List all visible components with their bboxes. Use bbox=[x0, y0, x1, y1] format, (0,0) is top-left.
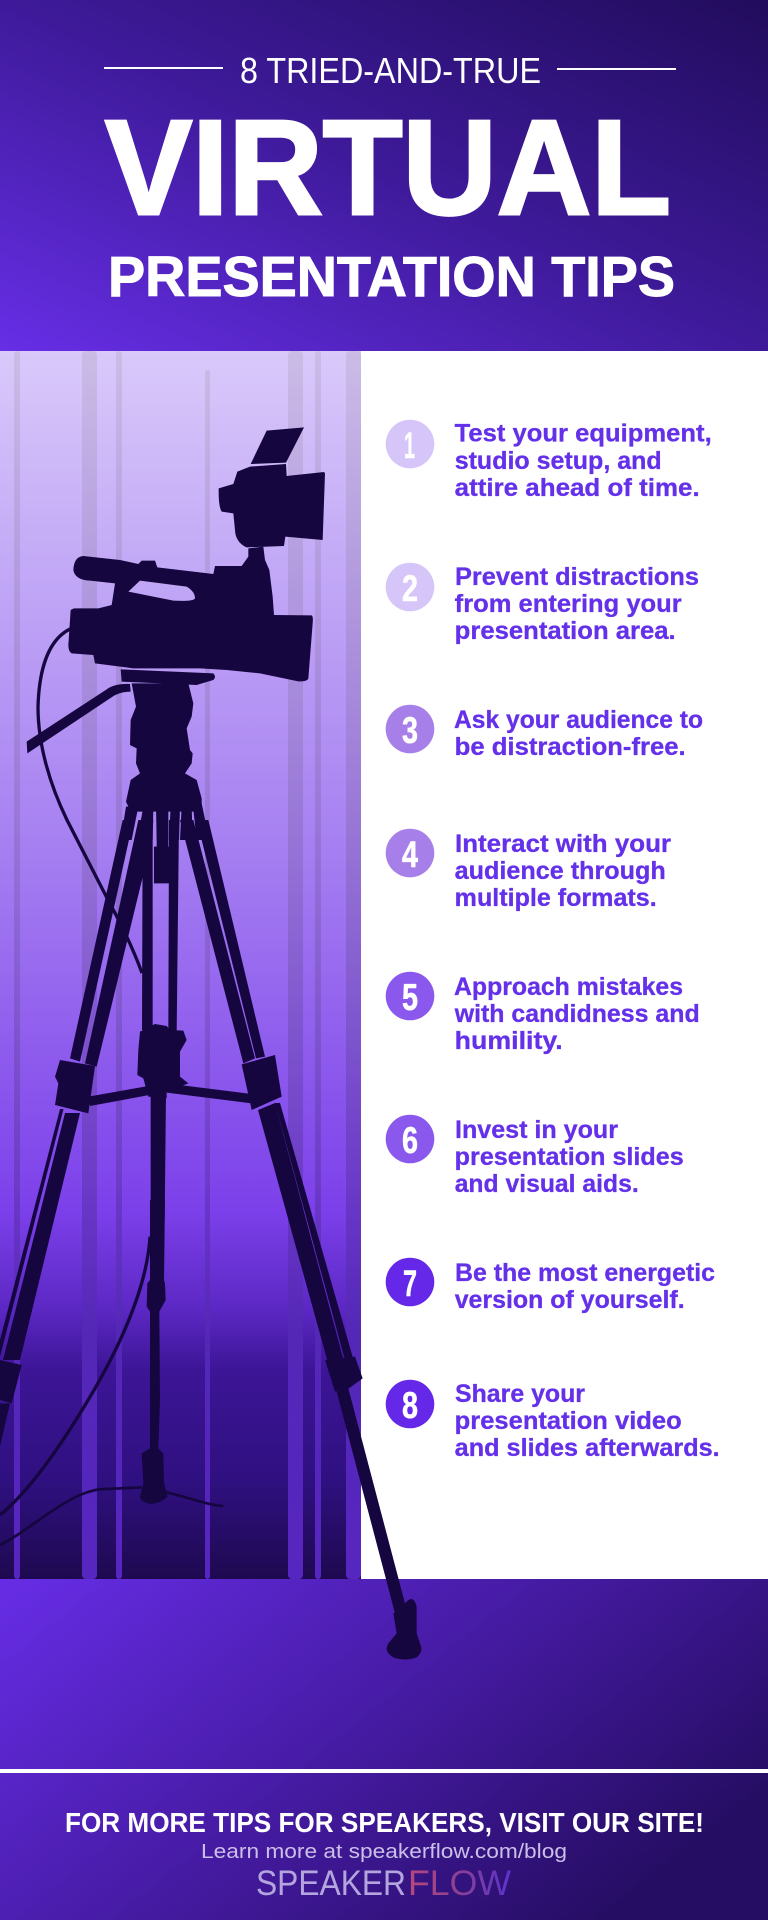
tip 5 bbox=[386, 972, 700, 1055]
number badge 6 bbox=[386, 1115, 434, 1163]
number badge 5 bbox=[386, 972, 434, 1020]
right leg upper tubes bbox=[180, 820, 265, 1063]
tip 8 text bbox=[455, 1380, 720, 1462]
right leg bottom bbox=[325, 1357, 405, 1613]
footer heading: FOR MORE TIPS FOR SPEAKERS, VISIT OUR SITE! bbox=[65, 1807, 704, 1838]
tip 2 text: presentation area. bbox=[455, 617, 676, 645]
tip 7 text bbox=[455, 1259, 715, 1314]
logo: SpeakerFlow: SPEAKER bbox=[256, 1864, 406, 1903]
tip 3 bbox=[386, 705, 703, 761]
number badge 8 bbox=[386, 1380, 434, 1428]
number badge 4 bbox=[386, 829, 434, 877]
logo: SpeakerFlow bbox=[256, 1864, 511, 1903]
main title: VIRTUAL bbox=[105, 92, 671, 243]
tripod head legs top bbox=[121, 803, 209, 840]
floor band background bbox=[0, 1579, 768, 1920]
tip 5 text: with candidness and bbox=[454, 1000, 700, 1028]
tip 2 text: from entering your bbox=[455, 590, 682, 618]
tip 6 bbox=[386, 1115, 684, 1198]
tip 5 text: humility. bbox=[455, 1027, 563, 1055]
tip 8 text: and slides afterwards. bbox=[455, 1434, 720, 1462]
tip 6 text: and visual aids. bbox=[455, 1170, 639, 1198]
footer block bbox=[65, 1807, 704, 1903]
cable upper bbox=[38, 629, 142, 973]
tip 2 bbox=[386, 563, 699, 645]
number badge 4: 4 bbox=[402, 834, 418, 875]
tip 8 text: presentation video bbox=[455, 1407, 682, 1435]
tip 7 bbox=[386, 1258, 715, 1314]
number badge 2: 2 bbox=[402, 568, 418, 609]
left clamp bbox=[55, 1060, 95, 1113]
number badge 6: 6 bbox=[402, 1120, 418, 1161]
tip 4 bbox=[386, 829, 671, 912]
tip 5 text: Approach mistakes bbox=[454, 973, 683, 1001]
number badge 5: 5 bbox=[402, 977, 418, 1018]
tip 3 text: be distraction-free. bbox=[455, 733, 686, 761]
tip 6 text: Invest in your bbox=[455, 1116, 618, 1144]
tip 1 text bbox=[455, 420, 712, 502]
center column bbox=[142, 820, 179, 1033]
tip 4 text: Interact with your bbox=[455, 830, 671, 858]
tip 1 bbox=[386, 420, 712, 502]
title rule right bbox=[557, 68, 676, 70]
tip 2 text: Prevent distractions bbox=[455, 563, 699, 591]
number badge 1: 1 bbox=[404, 425, 415, 466]
logo: SpeakerFlow: FLOW bbox=[408, 1864, 511, 1903]
center leg bottom bbox=[140, 1200, 168, 1504]
divider line bbox=[0, 1769, 768, 1773]
tip 6 text bbox=[455, 1116, 684, 1198]
tripod plate bbox=[121, 669, 215, 685]
footer link text: Learn more at speakerflow.com/blog bbox=[201, 1841, 567, 1863]
subtitle: PRESENTATION TIPS bbox=[108, 245, 675, 309]
right foot bbox=[387, 1599, 421, 1659]
header background bbox=[0, 0, 768, 351]
number badge 7 bbox=[386, 1258, 434, 1306]
title eyebrow: 8 TRIED-AND-TRUE bbox=[240, 50, 541, 91]
right clamp bbox=[242, 1055, 282, 1110]
number badge 1 bbox=[386, 420, 434, 468]
tip 7 text: version of yourself. bbox=[455, 1286, 685, 1314]
tip 7 text: Be the most energetic bbox=[455, 1259, 715, 1287]
panel: stage backdrop bbox=[0, 351, 361, 1579]
pan handle bbox=[27, 684, 131, 753]
camera viewfinder bbox=[219, 464, 325, 547]
number badge 3 bbox=[386, 705, 434, 753]
tip 4 text bbox=[455, 830, 671, 912]
tip 5 text bbox=[454, 973, 700, 1055]
number badge 3: 3 bbox=[402, 710, 418, 751]
tip 6 text: presentation slides bbox=[455, 1143, 684, 1171]
camera body bbox=[68, 547, 313, 681]
spreader arms bbox=[88, 1083, 252, 1106]
title block bbox=[104, 50, 676, 309]
tip 1 text: attire ahead of time. bbox=[455, 474, 700, 502]
tip 4 text: audience through bbox=[455, 857, 666, 885]
lower leg tubes bbox=[0, 1103, 353, 1363]
number badge 7: 7 bbox=[403, 1263, 417, 1304]
tip 8 bbox=[386, 1380, 720, 1462]
illustration: camera on tripod silhouette bbox=[0, 427, 421, 1659]
left clamp bottom bbox=[0, 1360, 22, 1447]
title rule left bbox=[104, 67, 223, 69]
center lower tube bbox=[151, 1093, 166, 1220]
tip 3 text: Ask your audience to bbox=[454, 706, 703, 734]
floor cable bbox=[0, 1487, 223, 1545]
tip 4 text: multiple formats. bbox=[455, 884, 657, 912]
tripod head bbox=[126, 683, 202, 812]
tip 1 text: studio setup, and bbox=[455, 447, 662, 475]
center hub bbox=[137, 1024, 188, 1098]
camera monitor flap bbox=[251, 427, 304, 464]
number badge 2 bbox=[386, 563, 434, 611]
tip 8 text: Share your bbox=[455, 1380, 585, 1408]
tip 1 text: Test your equipment, bbox=[455, 420, 712, 448]
cable lower bbox=[0, 1237, 150, 1515]
tip 3 text bbox=[454, 706, 703, 761]
number badge 8: 8 bbox=[402, 1385, 418, 1426]
tip 2 text bbox=[455, 563, 699, 645]
left leg upper tubes bbox=[70, 820, 153, 1067]
